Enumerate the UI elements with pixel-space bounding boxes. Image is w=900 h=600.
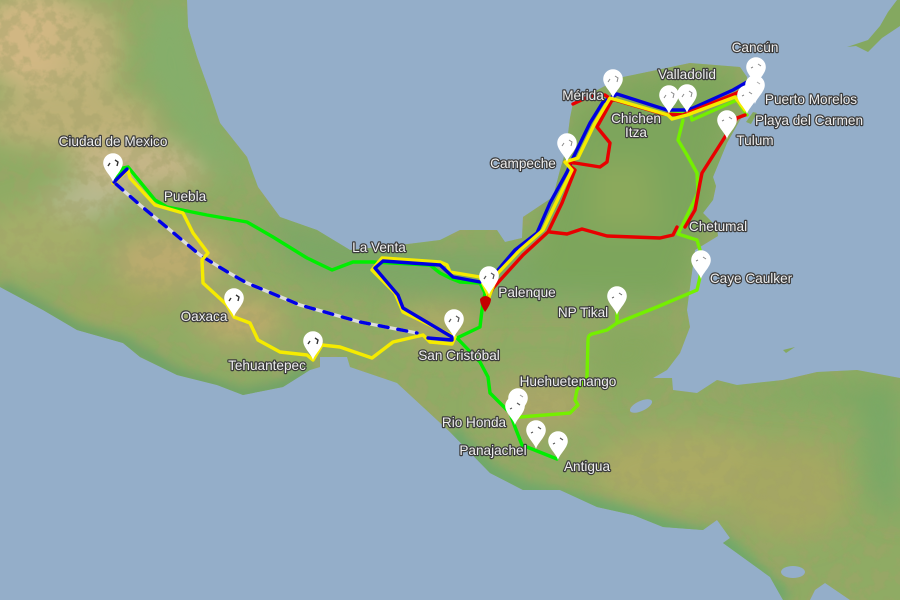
place labels (59, 40, 863, 474)
yellow route (113, 170, 489, 360)
place labels: Playa del Carmen (755, 113, 863, 128)
marker: Oaxaca (224, 288, 244, 317)
markers (103, 57, 766, 460)
place labels: Puerto Morelos (765, 92, 857, 107)
place labels: Puebla (164, 189, 207, 204)
marker: Antigua (548, 431, 568, 460)
place labels: NP Tikal (558, 305, 608, 320)
place labels: Antigua (564, 459, 610, 474)
marker: Ciudad de Mexico (103, 153, 123, 182)
marker: Palenque (479, 266, 499, 295)
place labels: Tulum (736, 133, 774, 148)
place labels: Rio Honda (442, 415, 507, 430)
red route (489, 85, 750, 296)
marker: San Cristobal (444, 309, 464, 338)
place labels: Valladolid (658, 67, 716, 82)
place labels: Campeche (490, 156, 556, 171)
green route (114, 167, 557, 459)
place labels: Itza (625, 125, 647, 140)
marker: Merida (603, 69, 623, 98)
red Palenque blob (480, 296, 491, 312)
blue route (114, 169, 127, 182)
marker: NP Tikal (607, 286, 627, 315)
yellow upper route (489, 97, 745, 297)
lakes (628, 396, 805, 578)
routes (113, 82, 750, 459)
place labels: Caye Caulker (710, 271, 793, 286)
place labels: Cancún (732, 40, 778, 55)
Cuba and Cozumel (746, 0, 900, 353)
place labels: Oaxaca (181, 309, 228, 324)
marker: Campeche (557, 133, 577, 162)
dashed blue route (116, 184, 417, 333)
lime route (520, 120, 702, 417)
marker: Rio Honda (505, 396, 525, 425)
place labels: Ciudad de Mexico (59, 134, 167, 149)
marker: Tehuantepec (303, 331, 323, 360)
marker: Caye Caulker (691, 250, 711, 279)
marker: Huehuetenango (508, 388, 528, 417)
place labels: Tehuantepec (228, 358, 306, 373)
place labels: Panajachel (459, 443, 527, 458)
place labels: San Cristóbal (418, 348, 500, 363)
place labels: La Venta (352, 240, 406, 255)
place labels: Chichen (611, 111, 661, 126)
place labels: Palenque (498, 285, 556, 300)
marker: Chichen Itza (659, 85, 679, 114)
marker: Cancun (746, 57, 766, 86)
marker: Panajachel (526, 420, 546, 449)
marker: Puerto Morelos (745, 75, 765, 104)
marker: Playa del Carmen (737, 85, 757, 114)
place labels: Chetumal (689, 219, 747, 234)
place labels: Huehuetenango (520, 374, 616, 389)
marker: Valladolid (677, 84, 697, 113)
place labels: Mérida (562, 88, 604, 103)
marker: Tulum (717, 110, 737, 139)
